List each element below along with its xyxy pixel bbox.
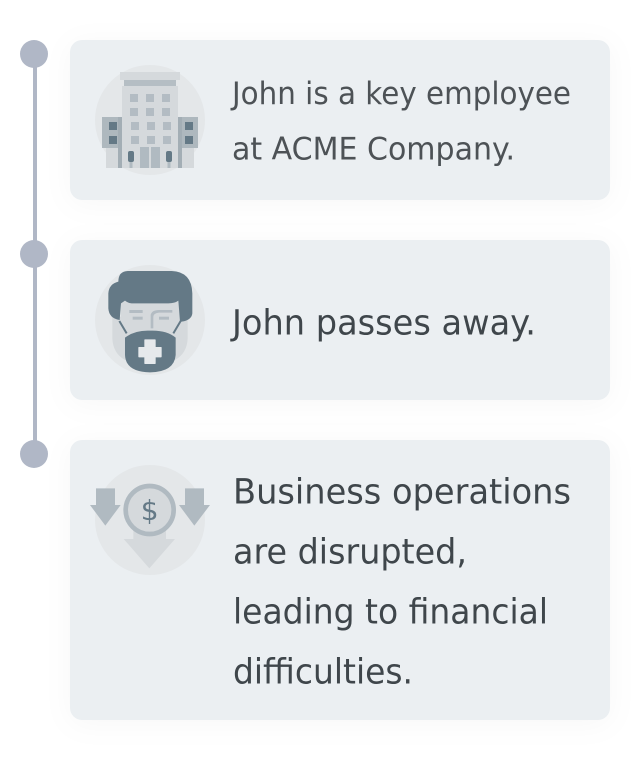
text: business operations disrupted [233, 472, 571, 692]
text: John passes away: John passes away. [230, 303, 536, 343]
text: John is a key employee: at ACME Company. [232, 132, 515, 168]
icon: man with medical mask [95, 265, 205, 375]
text: business operations disrupted: are disrupted, [233, 532, 467, 572]
timeline rail [20, 40, 48, 468]
text: John is a key employee: John is a key employee [230, 76, 571, 112]
panel: business disrupted [70, 440, 610, 720]
icon: office building [95, 65, 205, 175]
text: John is a key employee [230, 76, 571, 168]
panel: key employee [70, 40, 610, 200]
panel: John passes away [70, 240, 610, 400]
icon: money with falling arrows [90, 465, 210, 575]
text: business operations disrupted: leading to financial [233, 592, 548, 632]
text: business operations disrupted: Business operations [233, 472, 571, 512]
text: business operations disrupted: difficulties. [233, 652, 413, 692]
icon: money with falling arrows: $ [141, 494, 159, 527]
